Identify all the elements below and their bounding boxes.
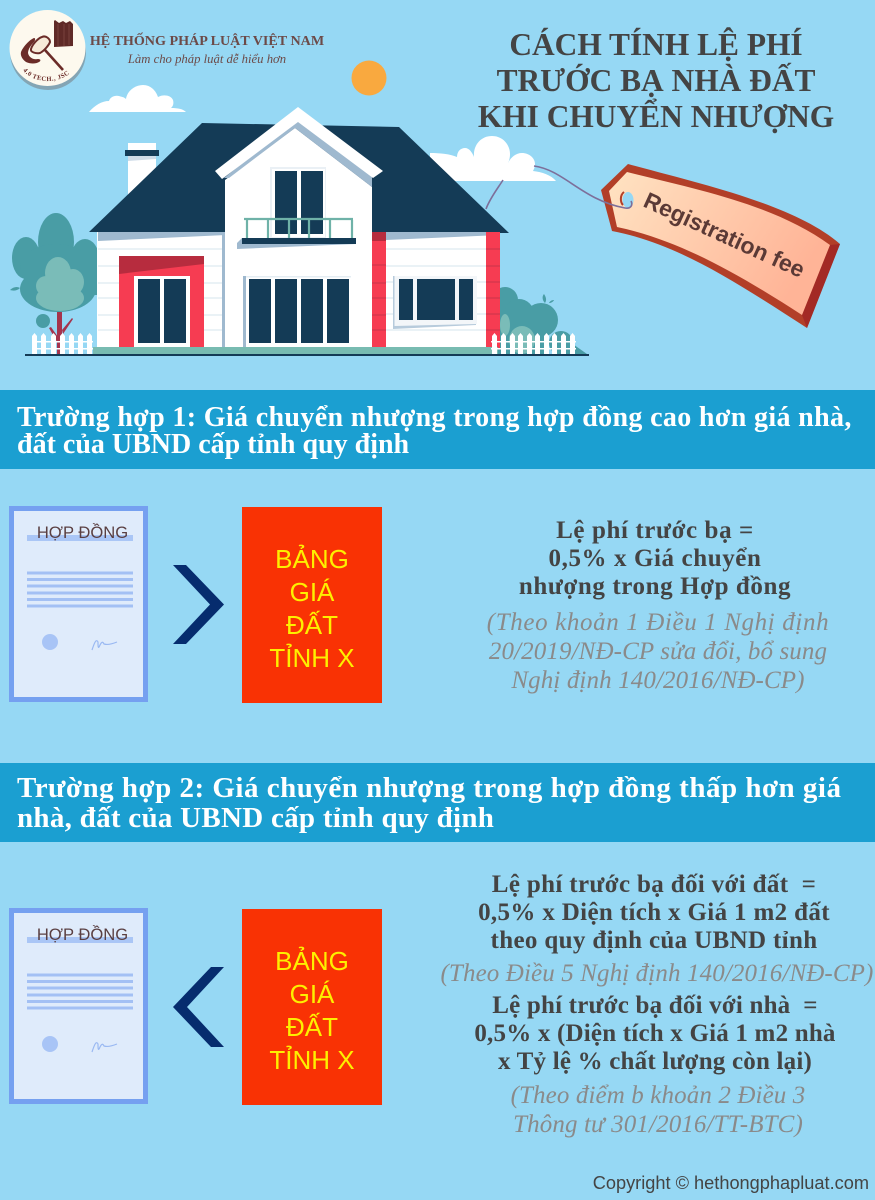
land price table 2: GIÁ xyxy=(290,979,334,1009)
logo: 4.0 TECH., JSC xyxy=(24,69,69,82)
land price table 2: BẢNG xyxy=(275,946,349,976)
contract icon 2: HỢP ĐỒNG xyxy=(37,925,128,944)
legal note 1: 20/2019/NĐ-CP sửa đổi, bổ sung xyxy=(489,638,827,665)
ground xyxy=(93,347,498,354)
land price table 1: BẢNG xyxy=(275,544,349,574)
icon: right cloud xyxy=(430,136,556,181)
case 1 banner: đất của UBND cấp tỉnh quy định xyxy=(17,429,409,460)
string xyxy=(486,166,632,209)
icon: left cloud xyxy=(89,85,186,112)
red column xyxy=(372,232,500,348)
contract icon 1: HỢP ĐỒNG xyxy=(37,523,128,542)
land price table 2: TỈNH X xyxy=(269,1045,355,1075)
formula 2a: theo quy định của UBND tỉnh xyxy=(491,927,817,954)
formula 2a xyxy=(478,871,830,954)
formula 2b xyxy=(474,992,836,1075)
price tag xyxy=(601,164,840,328)
icon: chimney xyxy=(125,143,159,198)
case 1 banner xyxy=(0,390,875,469)
land price table 1 xyxy=(242,507,382,703)
case 2 banner xyxy=(0,763,875,842)
icon: sun xyxy=(352,60,386,96)
case 1 banner: Trường hợp 1: Giá chuyển nhượng trong hợp đồng cao hơn giá nhà, xyxy=(17,402,852,433)
land price table 1: ĐẤT xyxy=(286,610,338,640)
illustration: house with price tag xyxy=(10,60,840,356)
land price table 2: ĐẤT xyxy=(286,1012,338,1042)
copyright: Copyright © hethongphapluat.com xyxy=(593,1173,869,1193)
icon: left tree xyxy=(10,213,99,354)
tag label: Registration fee xyxy=(640,187,809,283)
land price table 1: TỈNH X xyxy=(269,643,355,673)
legal note 2b: (Theo điểm b khoản 2 Điều 3 xyxy=(511,1082,805,1109)
formula 1: Lệ phí trước bạ = xyxy=(556,517,754,544)
land price table 2 xyxy=(242,909,382,1105)
formula 2a: Lệ phí trước bạ đối với đất = xyxy=(492,871,816,898)
red door frame xyxy=(119,256,204,348)
siding lines xyxy=(98,249,486,330)
arrow: contract less than price table xyxy=(173,967,224,1047)
title: TRƯỚC BẠ NHÀ ĐẤT xyxy=(497,63,815,98)
lower windows xyxy=(243,276,351,348)
legal note 2b: Thông tư 301/2016/TT-BTC) xyxy=(513,1111,803,1138)
land price table 1: GIÁ xyxy=(290,577,334,607)
logo slogan: Làm cho pháp luật dễ hiểu hơn xyxy=(128,52,286,66)
legal note 1: Nghị định 140/2016/NĐ-CP) xyxy=(511,667,805,694)
roof xyxy=(89,123,509,233)
formula 2a: 0,5% x Diện tích x Giá 1 m2 đất xyxy=(478,899,830,926)
contract icon 1 xyxy=(9,506,148,702)
legal note 1: (Theo khoản 1 Điều 1 Nghị định xyxy=(487,609,829,636)
icon: left fence xyxy=(32,333,93,354)
case 2 banner: nhà, đất của UBND cấp tỉnh quy định xyxy=(17,802,494,834)
icon: right bushes xyxy=(492,287,587,355)
legal note 1 xyxy=(487,609,829,694)
gable front xyxy=(225,128,372,348)
arrow: contract greater than price table xyxy=(173,565,224,644)
title: CÁCH TÍNH LỆ PHÍ xyxy=(509,27,803,62)
formula 2b: x Tỷ lệ % chất lượng còn lại) xyxy=(498,1048,812,1075)
formula 2b: 0,5% x (Diện tích x Giá 1 m2 nhà xyxy=(474,1020,836,1047)
formula 1: nhượng trong Hợp đồng xyxy=(519,573,791,600)
logo name: HỆ THỐNG PHÁP LUẬT VIỆT NAM xyxy=(90,33,324,49)
upper window xyxy=(270,167,326,238)
house body xyxy=(97,232,500,348)
legal note 2a: (Theo Điều 5 Nghị định 140/2016/NĐ-CP) xyxy=(440,960,874,987)
title xyxy=(478,27,834,134)
formula 1 xyxy=(519,517,791,600)
icon: right fence xyxy=(491,333,576,354)
balcony xyxy=(237,219,356,249)
formula 1: 0,5% x Giá chuyển xyxy=(548,545,762,572)
title: KHI CHUYỂN NHƯỢNG xyxy=(478,99,834,134)
contract icon 2 xyxy=(9,908,148,1104)
right window xyxy=(393,276,477,329)
legal note 2b xyxy=(511,1082,805,1138)
logo xyxy=(10,10,86,90)
case 2 banner: Trường hợp 2: Giá chuyển nhượng trong hợp đồng thấp hơn giá xyxy=(17,772,841,804)
formula 2b: Lệ phí trước bạ đối với nhà = xyxy=(492,992,818,1019)
